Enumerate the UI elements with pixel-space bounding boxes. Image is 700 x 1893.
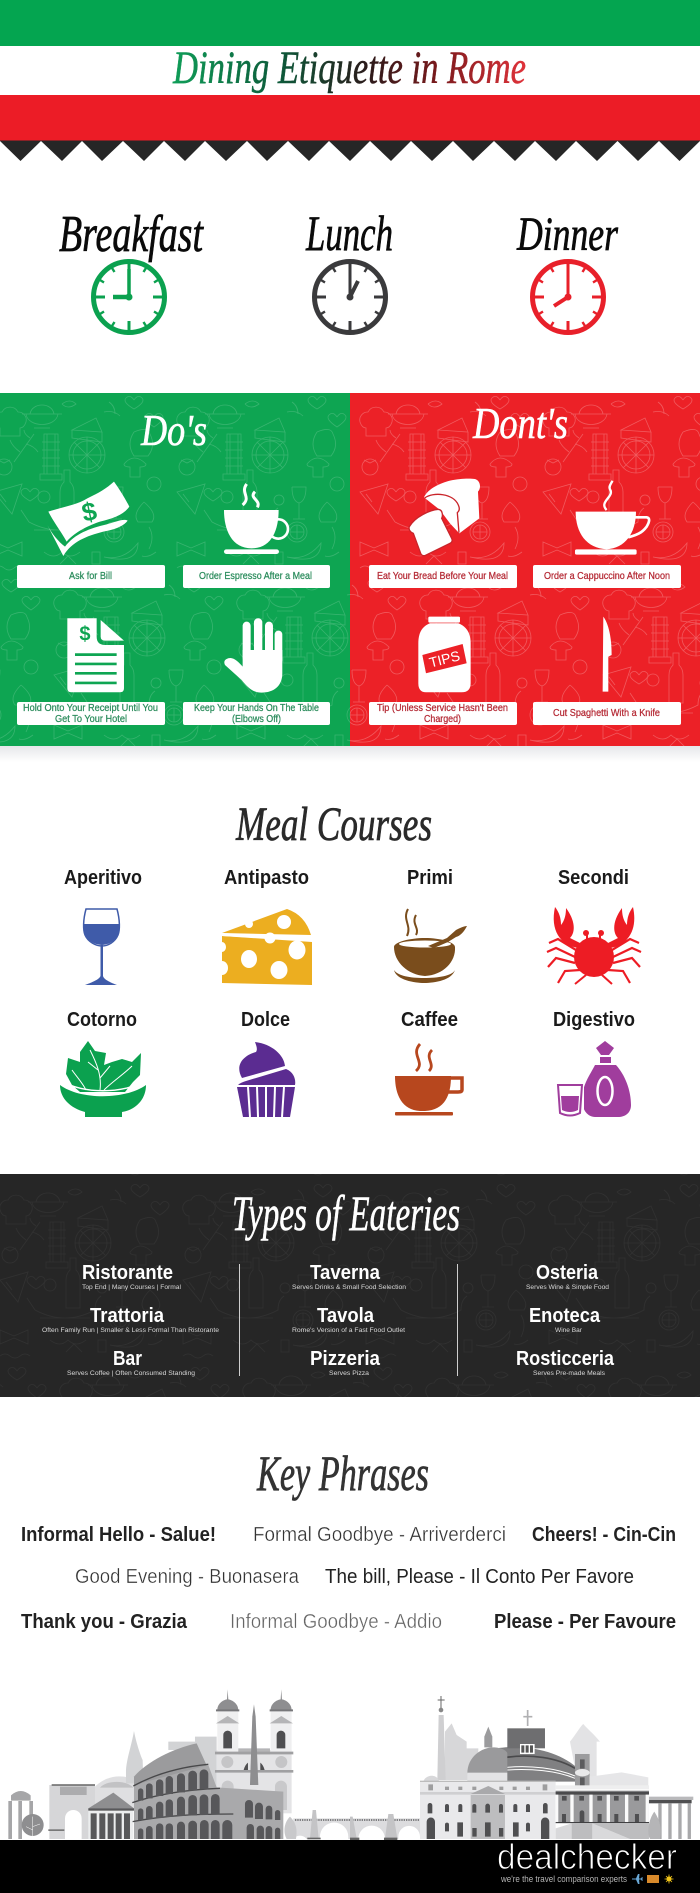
- column: left eateries: Serves Coffee | Often Consumed Standing: [67, 1370, 195, 1377]
- tagline: we're the travel comparison experts: [500, 1874, 627, 1884]
- text block: key phrases: Thank you - Grazia: [21, 1610, 188, 1633]
- icon: crab: [547, 907, 641, 984]
- heading: types of eateries: Types of Eateries: [232, 1185, 460, 1241]
- label: order a cappuccino: [533, 565, 681, 588]
- panel shadow: [0, 746, 700, 762]
- basilica dome: [423, 1727, 507, 1782]
- label: keep your hands on the table: [183, 702, 330, 725]
- icon: salad bowl: [60, 1041, 146, 1117]
- arch of titus: [48, 1784, 95, 1839]
- header flag banner: [0, 0, 700, 161]
- icon: receipt: [67, 618, 124, 692]
- icon: tips jar: TIPS: [427, 647, 462, 670]
- meal time: lunch: [305, 205, 393, 332]
- icon: cappuccino cup: [575, 481, 649, 555]
- course: contorno: Cotorno: [67, 1008, 137, 1031]
- heading: do's: Do's: [140, 406, 207, 455]
- column: left eateries: Top End | Many Courses | Formal: [82, 1284, 181, 1291]
- text block: key phrases: The bill, Please - Il Conto Per Favore: [325, 1565, 634, 1588]
- column: right eateries: Enoteca: [529, 1304, 601, 1327]
- label: hold onto receipt: Get To Your Hotel: [55, 714, 127, 725]
- column: left eateries: Bar: [113, 1347, 142, 1370]
- course: antipasto: [216, 866, 312, 985]
- column: centre eateries: [292, 1261, 406, 1377]
- label: eat your bread: [369, 565, 517, 588]
- text block: key phrases: Please - Per Favoure: [494, 1610, 676, 1633]
- column: right eateries: Serves Wine & Simple Food: [526, 1284, 609, 1291]
- icon: cheese: [216, 909, 312, 985]
- course: secondi: Secondi: [558, 866, 629, 889]
- label: hold onto receipt: Hold Onto Your Receipt Until You: [23, 703, 158, 714]
- column: left eateries: Often Family Run | Smaller & Less Formal Than Ristorante: [42, 1327, 219, 1334]
- logo: dealchecker: dealchecker: [497, 1836, 677, 1877]
- text block: key phrases: [21, 1523, 676, 1633]
- label: tip: [369, 702, 517, 725]
- column: centre eateries: Serves Drinks & Small Food Selection: [292, 1284, 406, 1291]
- colosseum: [132, 1743, 283, 1839]
- label: keep your hands on the table: Keep Your Hands On The Table: [194, 703, 319, 714]
- column: centre eateries: Taverna: [310, 1261, 381, 1284]
- bridge left: [293, 1810, 350, 1839]
- course: aperitivo: Aperitivo: [64, 866, 142, 889]
- label: order a cappuccino: Order a Cappuccino After Noon: [544, 571, 670, 582]
- column: right eateries: [516, 1261, 615, 1377]
- text block: key phrases: Informal Hello - Salue!: [21, 1523, 216, 1546]
- column: left eateries: Trattoria: [90, 1304, 165, 1327]
- icon: receipt: $: [79, 624, 90, 646]
- icon: banknotes: $: [79, 495, 100, 528]
- label: order espresso: Order Espresso After a Meal: [199, 571, 312, 582]
- text block: key phrases: Good Evening - Buonasera: [75, 1565, 300, 1588]
- basilica facade: [420, 1781, 556, 1839]
- label: cut spaghetti: Cut Spaghetti With a Knife: [553, 708, 661, 719]
- text block: key phrases: Cheers! - Cin-Cin: [532, 1523, 676, 1546]
- column: right eateries: Wine Bar: [555, 1327, 583, 1334]
- heading: key phrases: Key Phrases: [256, 1445, 429, 1501]
- icon: tips jar: [418, 617, 471, 692]
- meal time: breakfast: [59, 206, 204, 332]
- meal time: dinner: [516, 208, 618, 332]
- course: antipasto: Antipasto: [224, 866, 309, 889]
- icon: green clock at nine: [94, 262, 164, 332]
- text block: key phrases: Informal Goodbye - Addio: [230, 1610, 442, 1633]
- meal time: dinner: Dinner: [516, 208, 618, 261]
- icon: soup bowl: [394, 909, 467, 983]
- icon: bed: [647, 1875, 659, 1883]
- course: caffee: Caffee: [401, 1008, 458, 1031]
- zigzag border: [0, 140, 700, 161]
- label: keep your hands on the table: (Elbows Off): [232, 714, 281, 725]
- panel: types of eateries: [0, 1174, 700, 1397]
- label: hold onto receipt: [17, 702, 165, 725]
- column: right eateries: Serves Pre-made Meals: [533, 1370, 606, 1377]
- course: caffee: [395, 1008, 462, 1116]
- meal time: breakfast: Breakfast: [59, 206, 204, 263]
- back dome and buildings: [126, 1731, 217, 1787]
- course: digestivo: [553, 1008, 635, 1117]
- footer bar: [0, 1836, 700, 1893]
- icon: plane: [632, 1874, 642, 1884]
- obelisk with cross: [437, 1696, 446, 1780]
- second building with columns: [555, 1785, 649, 1839]
- pantheon: [88, 1776, 134, 1839]
- course: primi: [394, 866, 467, 983]
- column: left eateries: Ristorante: [82, 1261, 173, 1284]
- heading: don'ts: Dont's: [472, 399, 568, 448]
- course: digestivo: Digestivo: [553, 1008, 635, 1031]
- label: ask for bill: [17, 565, 165, 588]
- label: tip: Charged): [424, 714, 461, 725]
- title: Dining Etiquette in Rome: [172, 42, 526, 94]
- meal time: lunch: Lunch: [305, 205, 393, 261]
- course: dolce: [237, 1008, 295, 1117]
- column: centre eateries: Pizzeria: [310, 1347, 381, 1370]
- label: order espresso: [183, 565, 330, 588]
- panel: meal courses grid: [60, 866, 641, 1117]
- castel sant'angelo: [497, 1710, 590, 1787]
- icon: sun: [664, 1874, 674, 1884]
- label: tip: Tip (Unless Service Hasn't Been: [377, 703, 508, 714]
- label: eat your bread: Eat Your Bread Before Your Meal: [377, 571, 508, 582]
- column: centre eateries: Serves Pizza: [329, 1370, 369, 1377]
- label: ask for bill: Ask for Bill: [69, 571, 112, 582]
- icon: red clock at eight: [532, 262, 604, 332]
- course: dolce: Dolce: [241, 1008, 290, 1031]
- column: right eateries: Rosticceria: [516, 1347, 615, 1370]
- column: centre eateries: Tavola: [317, 1304, 375, 1327]
- icon: banknotes: [47, 482, 129, 556]
- course: contorno: [60, 1008, 146, 1117]
- skyline: right, basilica and castel: [350, 1696, 693, 1840]
- temple ruins: [8, 1791, 33, 1839]
- course: secondi: [547, 866, 641, 984]
- church: [215, 1689, 293, 1813]
- bridge right: [350, 1814, 421, 1840]
- icon: coffee cup: [395, 1044, 462, 1116]
- panel: don'ts: [350, 393, 700, 746]
- panel: do's: [0, 393, 350, 746]
- tree small: [284, 1817, 297, 1839]
- icon: cupcake: [237, 1042, 295, 1117]
- column: right eateries: Osteria: [536, 1261, 599, 1284]
- icon: bottle and glass: [555, 1041, 631, 1117]
- column: centre eateries: Rome's Version of a Fast Food Outlet: [292, 1327, 405, 1334]
- icon: espresso cup: [224, 484, 288, 554]
- icon: knife: [603, 617, 612, 692]
- icon: raised hand: [224, 618, 282, 693]
- column: left eateries: [42, 1261, 219, 1377]
- icon: dark clock at noon: [314, 262, 386, 332]
- heading: meal courses: Meal Courses: [235, 798, 432, 851]
- portico: [648, 1797, 693, 1839]
- icon: wine glass: [84, 909, 119, 985]
- back shapes: [570, 1724, 600, 1777]
- label: cut spaghetti: [533, 702, 681, 725]
- skyline: left, ruins, colosseum and church: [8, 1689, 350, 1839]
- icon: bread: [409, 479, 480, 556]
- tree: [22, 1814, 44, 1839]
- course: primi: Primi: [407, 866, 453, 889]
- course: aperitivo: [64, 866, 142, 985]
- text block: key phrases: Formal Goodbye - Arriverderci: [253, 1523, 506, 1546]
